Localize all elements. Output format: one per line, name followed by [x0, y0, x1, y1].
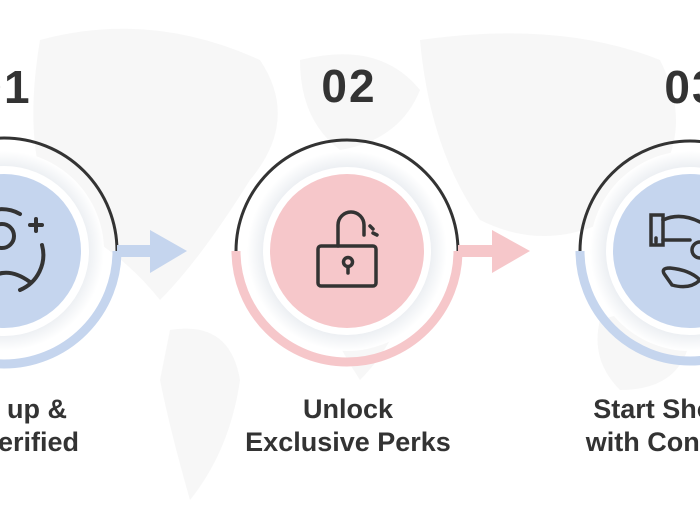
step 1: [0, 61, 187, 457]
step 1 arrow: [117, 230, 187, 273]
step 2 ring: [236, 140, 458, 362]
step 2: [236, 60, 530, 457]
step 1 ring: [0, 138, 117, 364]
step 2 number: 02: [321, 60, 377, 112]
step 3 ring: [580, 141, 700, 361]
icon: open padlock: [318, 212, 377, 286]
step 2 label: Exclusive Perks: [245, 427, 451, 457]
step 2 arrow: [458, 230, 530, 273]
icon: hand giving: [651, 215, 700, 287]
step 2 label: Unlock: [303, 394, 394, 424]
step 3: [580, 61, 700, 457]
icon: add user: [0, 209, 43, 290]
